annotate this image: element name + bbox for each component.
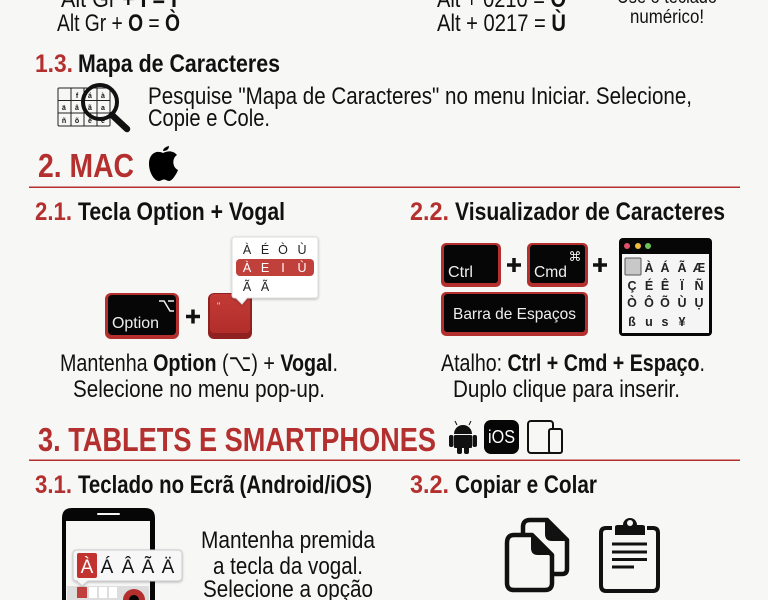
popup: accent menu: À xyxy=(243,242,252,257)
text: shortcut instructions: Atalho: Ctrl + Cmd + Espaço. xyxy=(441,350,705,377)
icon: character viewer window: u xyxy=(645,315,653,329)
divider: mac section xyxy=(29,186,740,188)
key: Ctrl xyxy=(441,243,501,287)
key: red vowel key xyxy=(208,293,252,339)
icon: character map with magnifier: ñ xyxy=(62,118,66,125)
heading 3.2: Copiar e Colar xyxy=(455,471,597,499)
icon: phone with accent popup: Ä xyxy=(162,557,175,578)
popup: accent menu: Ù xyxy=(297,260,307,275)
heading 2 MAC: 2. MAC xyxy=(38,147,134,184)
text: numeric keypad note xyxy=(617,0,717,28)
icon: phone with accent popup: Ã xyxy=(142,556,155,578)
text: shortcut instructions xyxy=(441,350,705,403)
text: numeric keypad note: numérico! xyxy=(630,7,704,28)
icon: character map with magnifier: è xyxy=(101,118,105,125)
icon: character viewer window: ¥ xyxy=(679,315,686,329)
key: Option xyxy=(105,293,179,339)
heading 2.2: Visualizador de Caracteres xyxy=(455,198,725,226)
icon: character viewer window: Ï xyxy=(679,278,684,293)
text: character map instructions: Pesquise "Mapa de Caracteres" no menu Iniciar. Selecione, xyxy=(148,83,692,110)
heading 2.1: Tecla Option + Vogal xyxy=(78,198,285,226)
text: on-screen keyboard instructions: Mantenha premida xyxy=(201,527,376,554)
icon: character map with magnifier xyxy=(58,85,127,129)
popup: accent menu: À xyxy=(243,260,252,275)
icon: character map with magnifier: â xyxy=(75,105,79,112)
icon: character viewer window: À xyxy=(644,260,654,275)
key: Cmd: Cmd xyxy=(534,264,567,281)
icon: character viewer window: É xyxy=(645,278,653,293)
icon: phone with accent popup: À xyxy=(81,557,94,578)
icon: character map with magnifier: ä xyxy=(62,105,66,112)
plus sign xyxy=(593,258,607,272)
popup: accent menu: Ã xyxy=(261,280,270,294)
text: on-screen keyboard instructions xyxy=(201,527,376,600)
icon: phone with accent popup xyxy=(62,508,182,600)
icon: character viewer window: Ò xyxy=(627,295,637,310)
heading 1.3: Mapa de Caracteres xyxy=(78,50,280,78)
icon: character viewer window: Ç xyxy=(627,279,637,293)
icon: character viewer window: Õ xyxy=(660,295,670,310)
text: character map instructions: Copie e Cole. xyxy=(148,105,270,132)
popup: accent menu: E xyxy=(261,261,269,275)
icon: phone with accent popup: Á xyxy=(101,557,114,578)
key: Ctrl: Ctrl xyxy=(448,264,473,281)
icon: character viewer window: s xyxy=(662,315,669,329)
key: red vowel key: " xyxy=(217,301,220,311)
icon: iOS badge: iOS xyxy=(488,427,515,447)
heading 3.1: Teclado no Ecrã (Android/iOS) xyxy=(78,471,372,499)
icon: clipboard xyxy=(601,518,658,591)
icon: character map with magnifier: á xyxy=(88,93,92,100)
icon: character viewer window: Ô xyxy=(644,295,654,310)
icon: character map with magnifier: ã xyxy=(88,105,92,112)
popup: accent menu: Ã xyxy=(243,280,252,294)
icon: phone with accent popup: Â xyxy=(122,556,135,578)
icon: character viewer window: Æ xyxy=(693,261,706,275)
icon: character viewer window: Ù xyxy=(677,295,687,310)
icon: character viewer window: Ñ xyxy=(694,278,704,293)
icon: character map with magnifier: a xyxy=(101,105,105,112)
icon: android xyxy=(449,421,477,454)
heading 2.1: 2.1. xyxy=(35,198,72,226)
icon: apple xyxy=(149,146,178,181)
text: on-screen keyboard instructions: a tecla da vogal. xyxy=(213,553,363,580)
heading 3 tablets and smartphones: 3. TABLETS E SMARTPHONES xyxy=(38,421,436,458)
icon: character viewer window: Ã xyxy=(677,260,687,275)
text: option instructions: Selecione no menu pop-up. xyxy=(73,376,325,403)
icon: character map with magnifier: ê xyxy=(88,118,92,125)
heading 3.2: 3.2. xyxy=(410,471,449,499)
popup: accent menu: É xyxy=(261,242,269,257)
icon: character viewer window: Ê xyxy=(661,278,669,293)
heading 1.3: 1.3. xyxy=(35,50,73,78)
plus sign xyxy=(186,310,200,324)
icon: character map with magnifier: f xyxy=(76,93,79,100)
text: option instructions: Mantenha Option (⌥) + Vogal. xyxy=(60,350,338,377)
icon: character viewer window: ß xyxy=(628,315,636,329)
text: option instructions xyxy=(60,350,338,403)
popup: accent menu: I xyxy=(281,261,285,275)
icon: character viewer window: Ụ xyxy=(694,296,704,310)
popup: accent menu xyxy=(232,237,318,304)
icon: copy documents xyxy=(507,520,567,590)
icon: tablet and phone xyxy=(528,421,562,453)
key: space bar: Barra de Espaços xyxy=(453,306,576,323)
key: Cmd: ⌘ xyxy=(568,250,582,265)
popup: accent menu: Ù xyxy=(297,242,307,257)
icon: character map with magnifier: à xyxy=(101,93,105,100)
plus sign xyxy=(507,258,521,272)
key: Cmd xyxy=(527,243,588,287)
text: Alt Gr shortcuts: Alt Gr + O = Ò xyxy=(57,9,180,37)
key: Option: Option xyxy=(112,315,159,332)
icon: character viewer window: Á xyxy=(660,260,670,275)
divider: tablets section xyxy=(29,460,740,461)
key: space bar xyxy=(441,292,588,336)
popup: accent menu: Ò xyxy=(278,242,288,257)
heading 3.1: 3.1. xyxy=(35,471,72,499)
heading 2.2: 2.2. xyxy=(410,198,449,226)
text: shortcut instructions: Duplo clique para inserir. xyxy=(453,376,680,403)
icon: character map with magnifier: õ xyxy=(75,118,79,125)
icon: iOS badge xyxy=(484,420,519,454)
text: character map instructions xyxy=(148,83,692,132)
text: Alt code shortcuts: Alt + 0217 = Ù xyxy=(437,9,566,37)
icon: character viewer window xyxy=(619,238,712,336)
